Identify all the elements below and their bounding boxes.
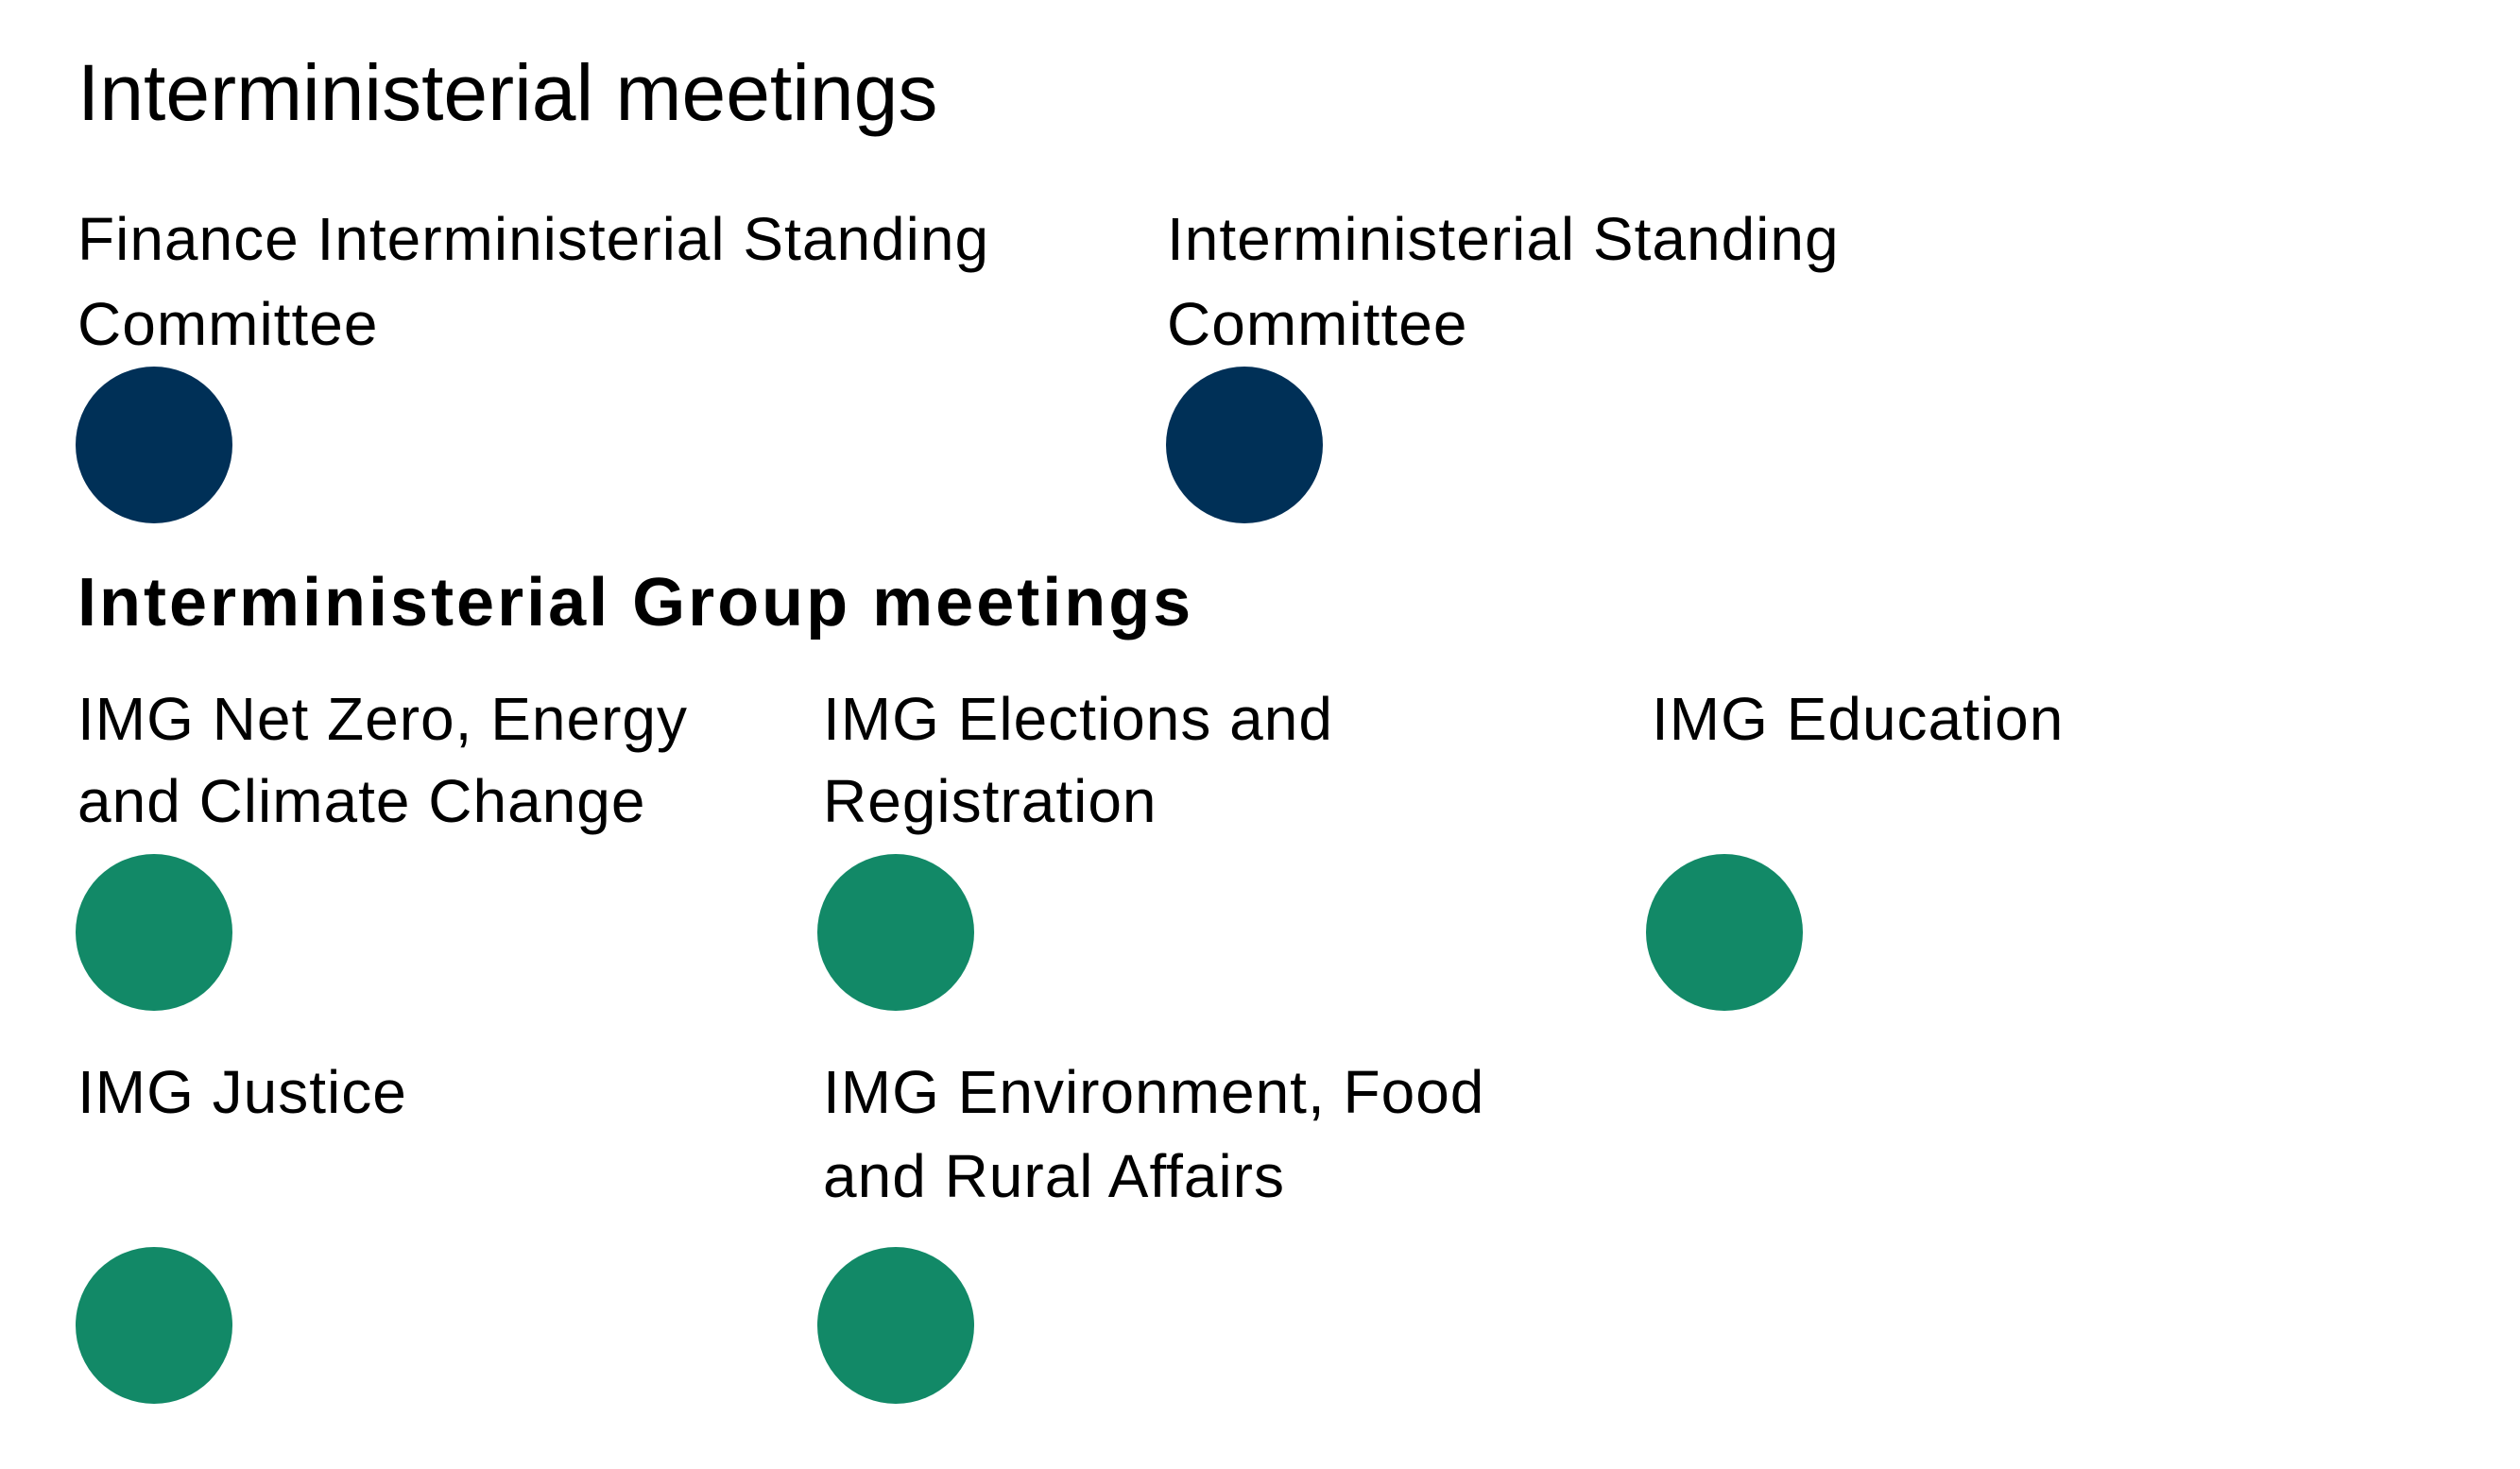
item: Finance Interministerial Standing Committee: [76, 205, 989, 523]
item: Interministerial Standing Committee: Committee: [1167, 290, 1467, 358]
item: IMG Justice: IMG Justice: [77, 1058, 407, 1126]
title: Interministerial meetings: [77, 48, 937, 137]
item: IMG Net Zero: IMG Net Zero, Energy: [77, 685, 688, 753]
item: IMG Justice: [76, 1058, 407, 1404]
heading: Interministerial Group meetings: Interministerial Group meetings: [77, 565, 1193, 641]
item: Finance Interministerial Standing Committee: Committee: [77, 290, 378, 358]
item: Interministerial Standing Committee: Interministerial Standing: [1167, 205, 1840, 273]
item: IMG Net Zero: and Climate Change: [77, 767, 645, 835]
item: IMG Elections: IMG Elections and: [823, 685, 1333, 753]
item: IMG Environment: and Rural Affairs: [823, 1142, 1285, 1210]
item: IMG Environment: [817, 1058, 1484, 1404]
item: IMG Education: IMG Education: [1652, 685, 2064, 753]
item: Interministerial Standing Committee: [1166, 205, 1840, 523]
item: IMG Education: [1646, 685, 2064, 1011]
item: Finance Interministerial Standing Committee: Finance Interministerial Standing: [77, 205, 989, 273]
item: IMG Elections: [817, 685, 1333, 1011]
item: IMG Environment: IMG Environment, Food: [823, 1058, 1484, 1126]
item: IMG Net Zero: [76, 685, 688, 1011]
item: IMG Elections: Registration: [823, 767, 1157, 835]
